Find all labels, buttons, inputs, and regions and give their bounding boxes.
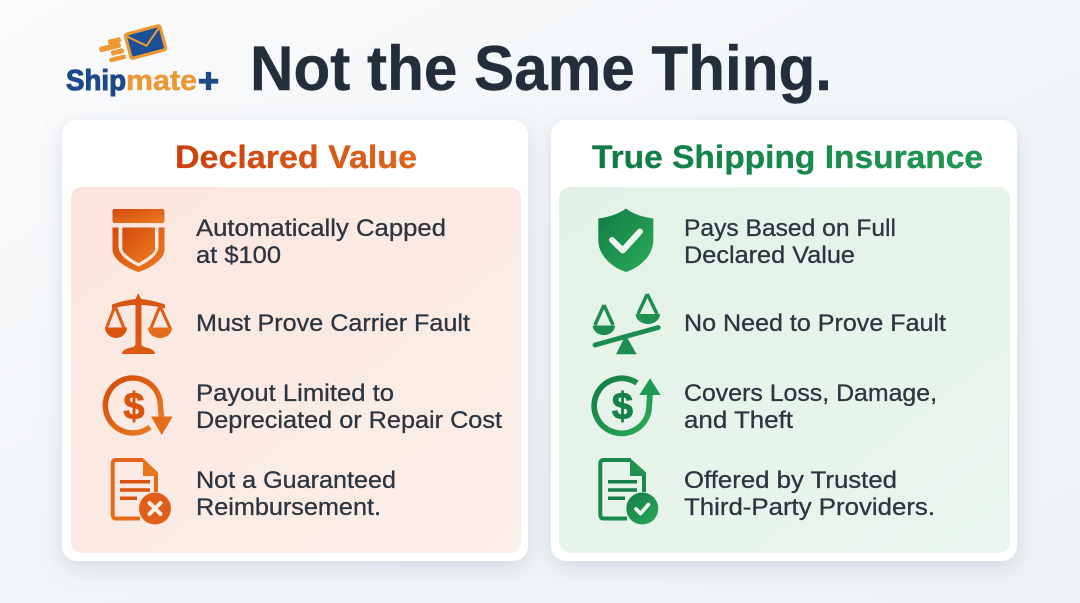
icon: document with check: [600, 458, 658, 524]
icon: dollar with down arrow: $: [123, 386, 145, 428]
icon: shield with check: [598, 208, 653, 272]
text: pays full declared value: [684, 215, 896, 269]
icon: capped shield: [112, 209, 164, 272]
logo: Shipmate+: +: [198, 62, 219, 99]
icon: tilted scale: [593, 294, 660, 354]
text: not guaranteed: Not a Guaranteed: [196, 467, 396, 494]
text: not guaranteed: Reimbursement.: [196, 494, 381, 521]
panel: Declared Value: [62, 120, 528, 561]
text: capped at $100: [196, 215, 446, 269]
heading: True Shipping Insurance: True Shipping Insurance: [592, 139, 983, 175]
text: prove carrier fault: Must Prove Carrier Fault: [196, 310, 470, 337]
title: Not the Same Thing.: [250, 34, 832, 104]
text: capped at $100: Automatically Capped: [196, 215, 446, 242]
text: pays full declared value: Pays Based on Full: [684, 215, 896, 242]
text: no fault: No Need to Prove Fault: [684, 310, 946, 337]
logo: Shipmate+: mate: [126, 65, 197, 97]
text: pays full declared value: Declared Value: [684, 242, 855, 269]
text: payout limited: Depreciated or Repair Cost: [196, 407, 502, 434]
text: covers loss: and Theft: [684, 407, 793, 434]
text: capped at $100: at $100: [196, 242, 281, 269]
text: not guaranteed: [196, 467, 396, 521]
logo: Shipmate+: Ship: [66, 65, 126, 97]
icon: dollar with down arrow: [105, 378, 173, 435]
text: payout limited: [196, 380, 502, 434]
text: third-party providers: Offered by Trusted: [684, 467, 897, 494]
panel: True Shipping Insurance: [551, 120, 1017, 561]
heading: Declared Value: Declared Value: [175, 139, 417, 175]
text: payout limited: Payout Limited to: [196, 380, 394, 407]
icon: dollar with up arrow: [594, 378, 661, 433]
icon: dollar with up arrow: $: [612, 386, 633, 428]
logo: Shipmate+: [66, 25, 219, 99]
text: covers loss: [684, 380, 937, 434]
icon: document with x: [113, 458, 171, 524]
text: third-party providers: Third-Party Providers.: [684, 494, 935, 521]
icon: flying envelope: [99, 25, 166, 63]
text: third-party providers: [684, 467, 935, 521]
icon: balance scales: [105, 293, 172, 354]
text: covers loss: Covers Loss, Damage,: [684, 380, 937, 407]
